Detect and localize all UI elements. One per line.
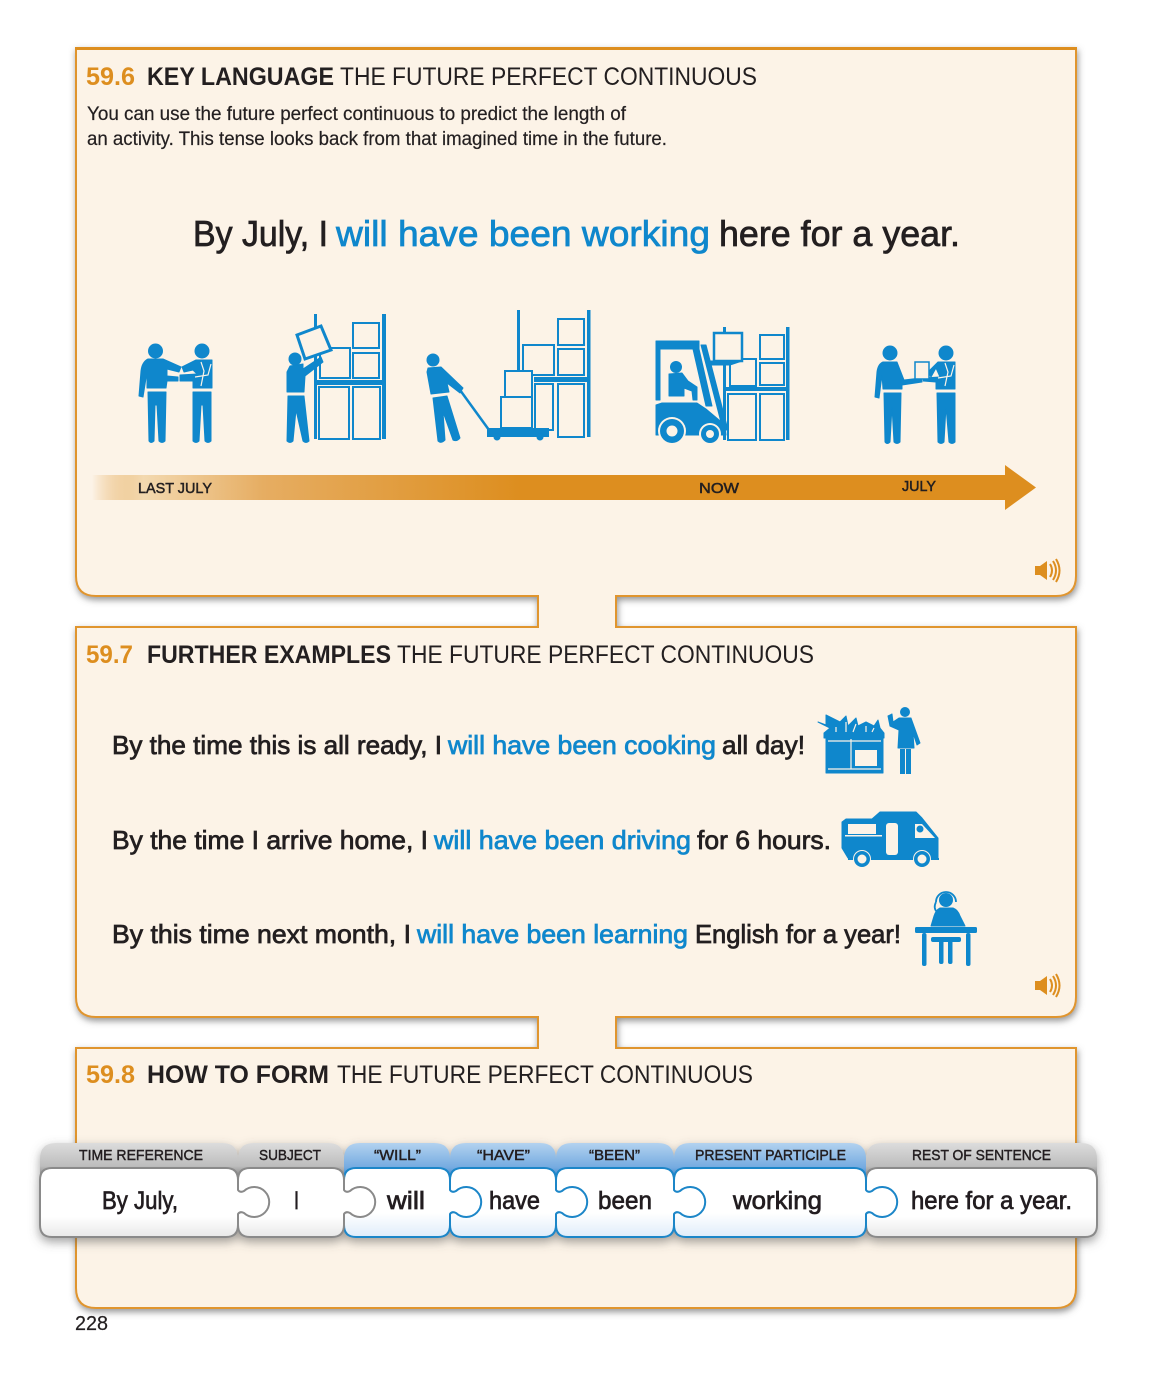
- piece: subject: I: [294, 1187, 299, 1215]
- icon: forklift: [656, 327, 790, 445]
- intro text: [87, 104, 667, 150]
- icon: two people with document: [875, 346, 955, 444]
- timeline label: now: NOW: [699, 480, 740, 497]
- timeline arrow: [92, 465, 1036, 510]
- example: learning: English for a year!: [695, 919, 901, 949]
- heading: 59.8: THE FUTURE PERFECT CONTINUOUS: [337, 1061, 753, 1089]
- top accent line: [75, 47, 1077, 50]
- piece: been: [556, 1143, 705, 1237]
- heading: 59.7: THE FUTURE PERFECT CONTINUOUS: [397, 641, 814, 669]
- heading: 59.7: 59.7: [86, 641, 133, 669]
- timeline label: July: JULY: [902, 478, 936, 495]
- icon: camper van: [842, 812, 939, 868]
- panel: 59.6 key language: [86, 63, 1060, 582]
- heading: 59.7: FURTHER EXAMPLES: [147, 641, 391, 669]
- panel: 59.7 further examples: [86, 641, 1060, 997]
- piece: rest of sentence: [866, 1143, 1097, 1237]
- example: driving: will have been driving: [433, 825, 691, 855]
- example: cooking: all day!: [722, 730, 805, 760]
- intro text: an activity. This tense looks back from that imagined time in the future.: [87, 129, 667, 150]
- example sentence: here for a year.: [719, 213, 960, 254]
- piece: time reference: [40, 1143, 269, 1237]
- example: cooking: [112, 730, 805, 760]
- example sentence: will have been working: [335, 213, 710, 254]
- icon: speaker: [1035, 559, 1060, 582]
- piece: been: “BEEN”: [589, 1147, 640, 1164]
- example: learning: will have been learning: [416, 919, 688, 949]
- icon: man stacking box on shelf: [287, 314, 386, 442]
- piece: subject: [238, 1143, 375, 1237]
- panel background: three linked panels: [76, 48, 1076, 1308]
- example: cooking: will have been cooking: [447, 730, 716, 760]
- panel: 59.8 how to form: [40, 1061, 1097, 1237]
- heading: 59.7: [86, 641, 814, 669]
- sentence formula: puzzle pieces: [40, 1143, 1097, 1237]
- piece: rest of sentence: REST OF SENTENCE: [912, 1147, 1051, 1164]
- example: learning: By this time next month, I: [112, 919, 411, 949]
- heading: 59.6: [86, 63, 757, 91]
- example: driving: By the time I arrive home, I: [112, 825, 428, 855]
- icon: man pulling cart: [426, 310, 590, 442]
- example: learning: [112, 919, 901, 949]
- heading: 59.6: THE FUTURE PERFECT CONTINUOUS: [340, 63, 757, 91]
- heading: 59.6: KEY LANGUAGE: [147, 63, 334, 91]
- piece: subject: SUBJECT: [259, 1147, 321, 1164]
- piece: present participle: [674, 1143, 897, 1237]
- piece: have: [450, 1143, 587, 1237]
- piece: present participle: PRESENT PARTICIPLE: [695, 1147, 846, 1164]
- piece: rest of sentence: here for a year.: [911, 1187, 1072, 1215]
- icon: speaker: [1035, 974, 1060, 997]
- heading: 59.6: 59.6: [86, 63, 135, 91]
- intro text: You can use the future perfect continuous to predict the length of: [87, 104, 627, 125]
- icon: two people shaking hands: [139, 344, 212, 442]
- piece: present participle: working: [732, 1187, 822, 1215]
- icon: person cooking: [818, 707, 920, 774]
- piece: been: been: [598, 1187, 652, 1215]
- page number: 228: [75, 1313, 108, 1335]
- piece: will: “WILL”: [374, 1147, 421, 1164]
- heading: 59.8: 59.8: [86, 1061, 135, 1089]
- piece: have: have: [489, 1187, 540, 1215]
- timeline label: last July: LAST JULY: [138, 480, 212, 497]
- piece: will: will: [386, 1187, 425, 1215]
- heading: 59.8: [86, 1061, 753, 1089]
- piece: will: [344, 1143, 481, 1237]
- piece: time reference: By July,: [102, 1187, 178, 1215]
- piece: time reference: TIME REFERENCE: [79, 1147, 203, 1164]
- example sentence: [193, 213, 960, 254]
- example: cooking: By the time this is all ready, I: [112, 730, 442, 760]
- example sentence: By July, I: [193, 213, 328, 254]
- piece: have: “HAVE”: [477, 1147, 530, 1164]
- example: driving: for 6 hours.: [697, 825, 831, 855]
- icon: student at desk with headset: [915, 892, 977, 966]
- heading: 59.8: HOW TO FORM: [147, 1061, 329, 1089]
- example: driving: [112, 825, 831, 855]
